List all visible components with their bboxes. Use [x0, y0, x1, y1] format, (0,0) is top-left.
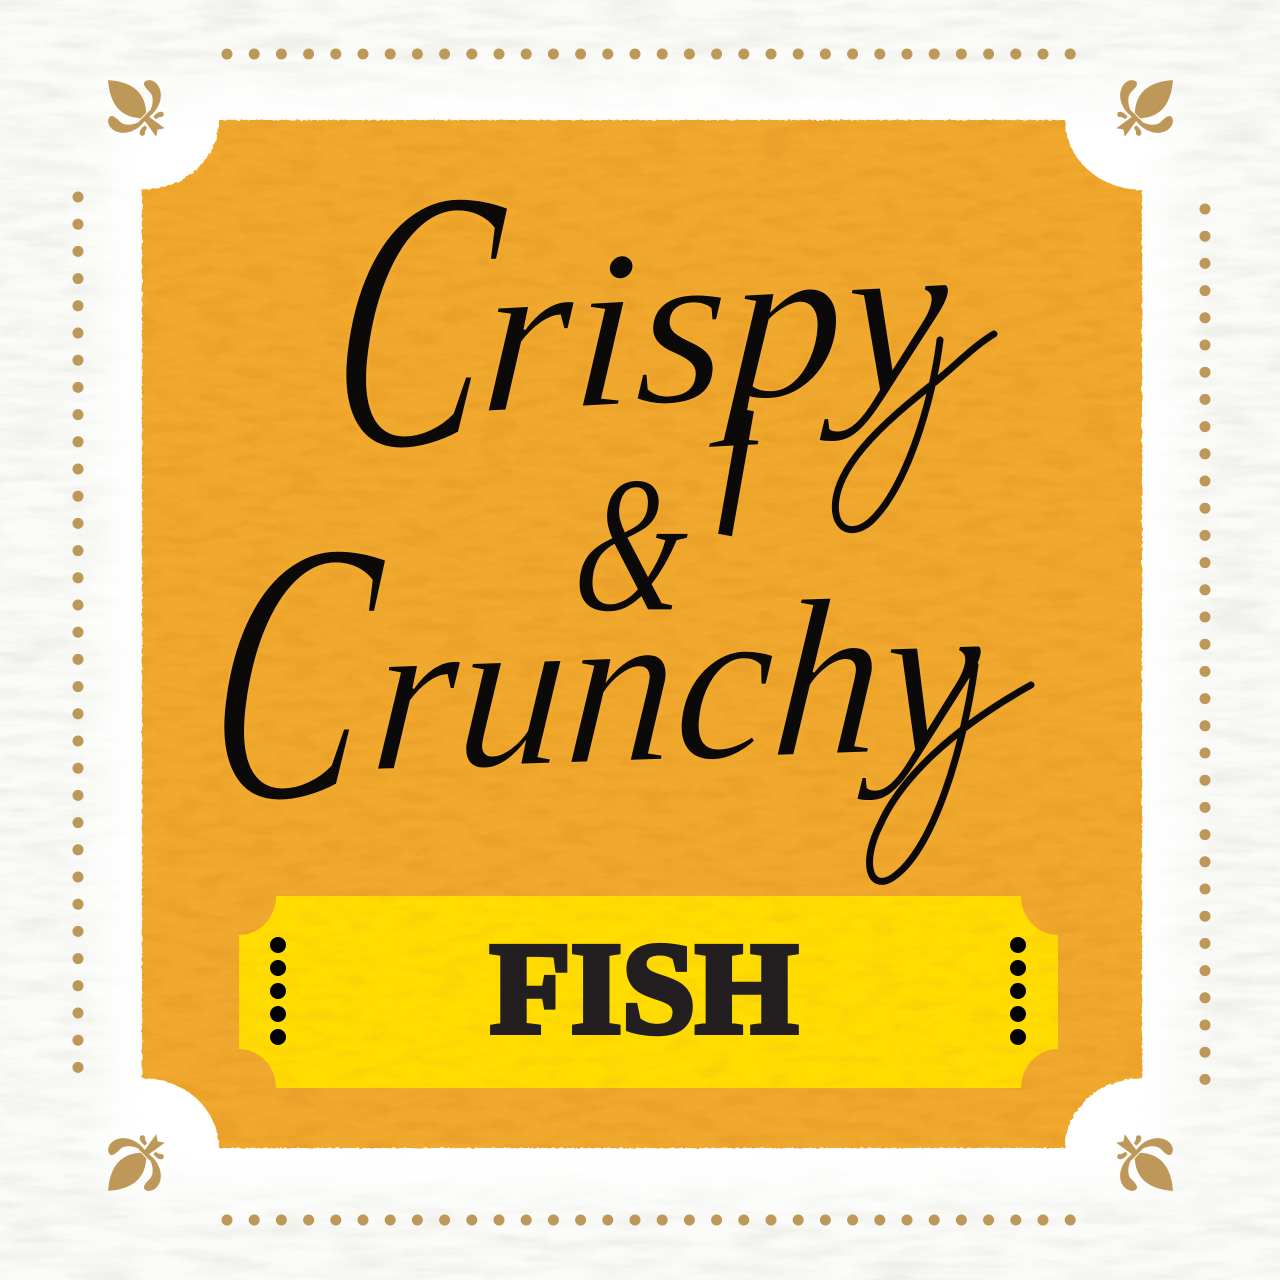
panel: yellow ticket — [239, 896, 1058, 1088]
dotted border: bottom — [227, 1214, 1073, 1226]
ticket dots: right — [1010, 937, 1026, 1045]
icon: fleur-de-lis top left — [86, 58, 183, 155]
panel: orange label — [142, 120, 1142, 1148]
heading: Crunchy — [190, 463, 1031, 881]
icon: fleur-de-lis bottom left — [86, 1116, 183, 1213]
dotted border: right — [1200, 209, 1210, 1082]
flourish: p descender — [725, 410, 747, 535]
text: ampersand: & — [565, 437, 699, 653]
heading: Crunchy: runchy — [365, 548, 990, 819]
heading: Crispy: C — [312, 111, 523, 527]
icon: fleur-de-lis top right — [1098, 58, 1195, 155]
flourish: y tail swash — [835, 334, 994, 530]
dotted border: left — [72, 197, 84, 1070]
flourish: y tail swash — [870, 665, 1031, 881]
dotted border: top — [227, 48, 1073, 60]
heading: Crunchy: C — [190, 463, 401, 879]
ticket dots: left — [270, 937, 286, 1045]
heading: Crispy — [312, 111, 994, 535]
heading: Crispy: rispy — [475, 187, 955, 461]
label: FISH: FISH — [490, 917, 798, 1061]
icon: fleur-de-lis bottom right — [1098, 1116, 1195, 1213]
